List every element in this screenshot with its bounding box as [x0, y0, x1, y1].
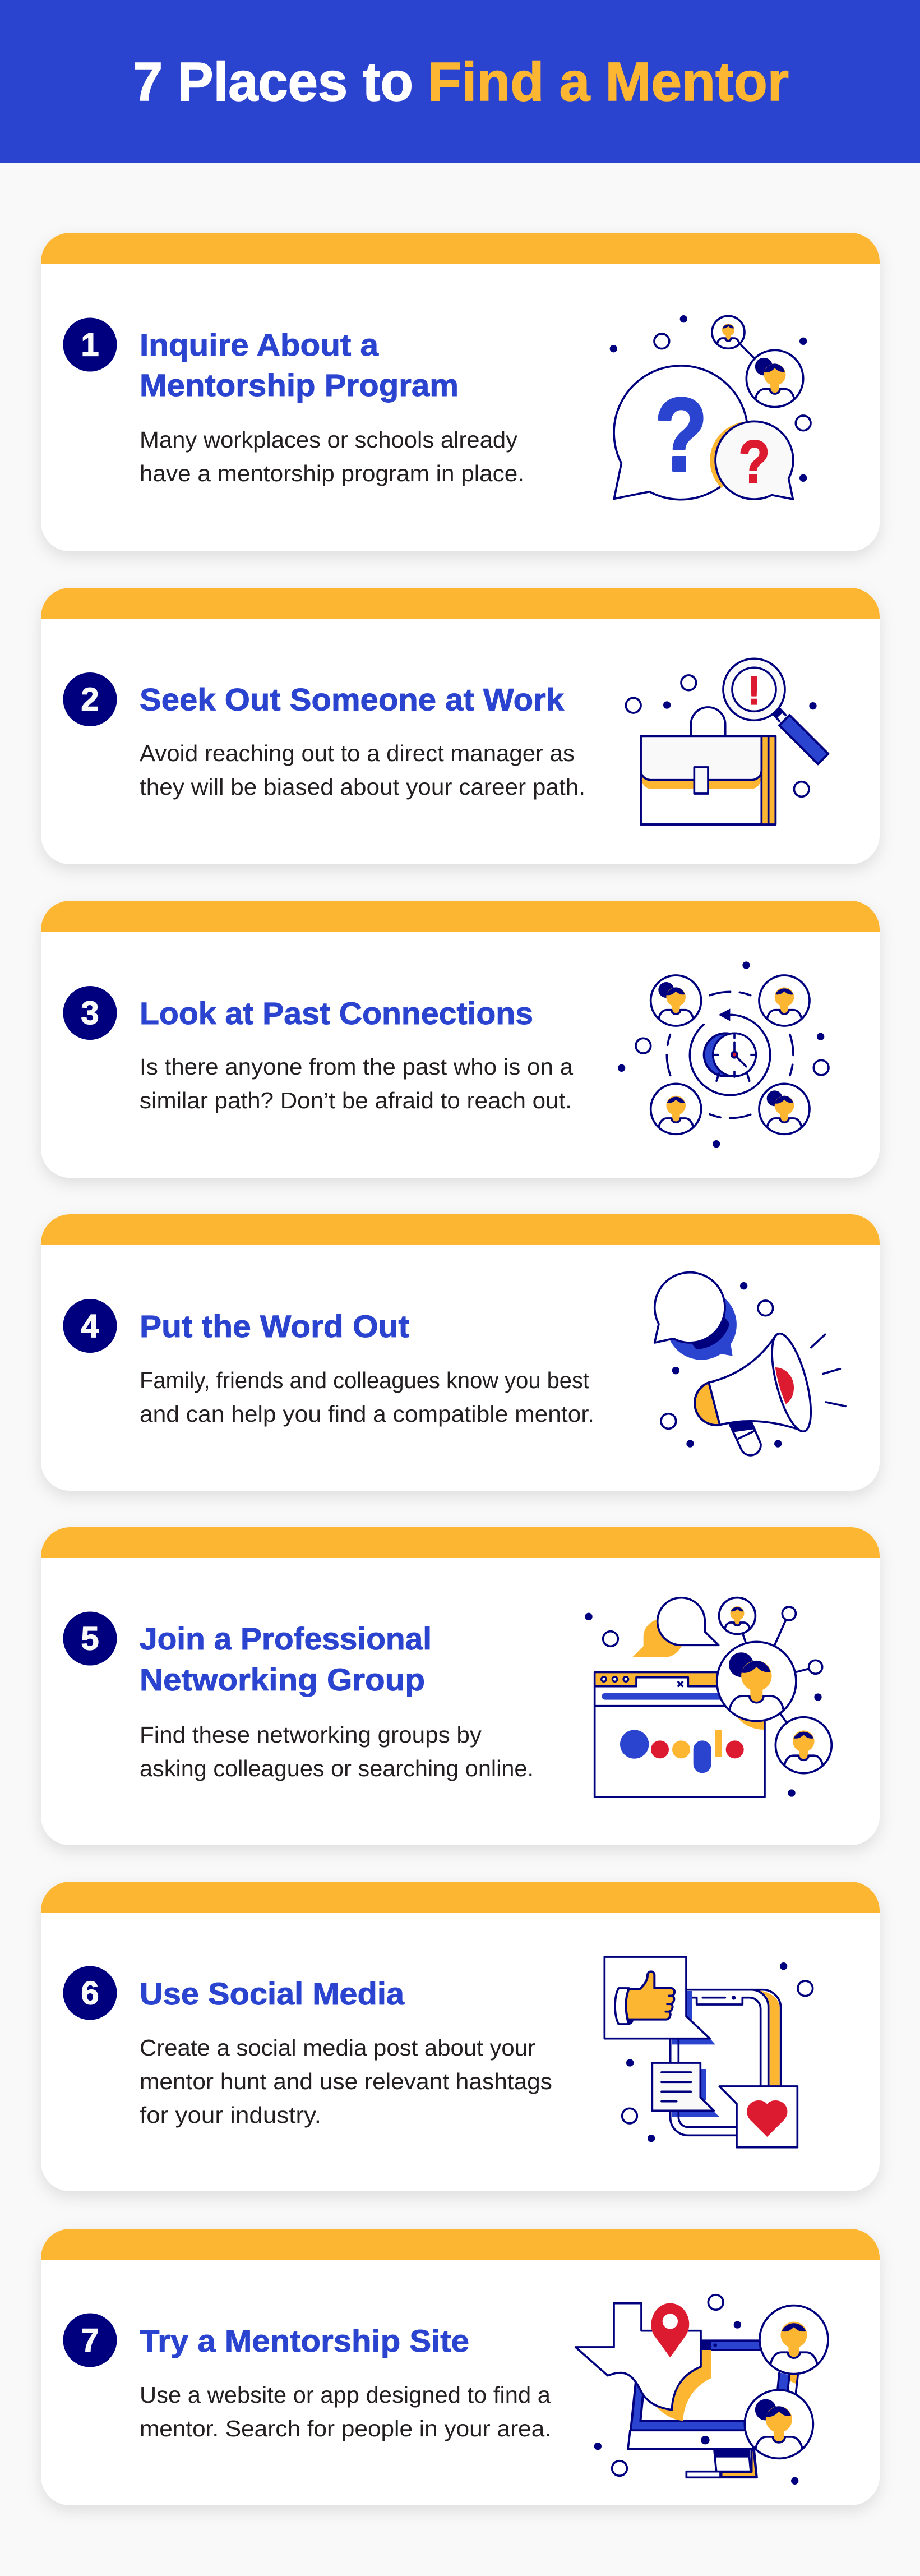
number badge 2: 2 [81, 681, 99, 718]
body text: and can help you find a compatible mentor. [140, 1401, 594, 1427]
panel: step 7 [41, 2229, 880, 2505]
heading: Put the Word Out [140, 1308, 409, 1344]
icon: phone with social media posts [604, 1957, 813, 2148]
heading: Join a Professional [140, 1621, 432, 1656]
body text: similar path? Don’t be afraid to reach out. [140, 1087, 572, 1113]
header banner [0, 0, 920, 163]
card top band [41, 2229, 880, 2260]
number badge 4 [63, 1299, 117, 1353]
icon: question speech bubbles: ? [738, 428, 770, 496]
heading: Use Social Media [140, 1976, 405, 2011]
body text [140, 740, 585, 800]
icon: question speech bubbles [610, 315, 811, 500]
icon: briefcase and magnifying glass: ! [747, 668, 761, 713]
title [133, 51, 789, 112]
body text: Family, friends and colleagues know you best [140, 1367, 590, 1393]
number badge 3 [63, 986, 117, 1040]
number badge 6: 6 [81, 1975, 99, 2011]
number badge 4: 4 [81, 1308, 99, 1344]
panel: step 1 [41, 233, 880, 551]
body text [140, 1367, 594, 1427]
number badge 3: 3 [81, 995, 99, 1031]
body text [140, 2382, 551, 2441]
body text: have a mentorship program in place. [140, 460, 524, 486]
card top band [41, 1882, 880, 1913]
body text: Use a website or app designed to find a [140, 2382, 551, 2408]
body text: Find these networking groups by [140, 1722, 482, 1748]
heading [140, 327, 459, 403]
body text: Is there anyone from the past who is on a [140, 1054, 573, 1080]
card body [41, 2229, 880, 2505]
icon: browser search and network [585, 1598, 831, 1797]
body text [140, 2035, 552, 2128]
panel: step 6 [41, 1882, 880, 2191]
heading: Inquire About a [140, 327, 379, 362]
title: 7 Places to [133, 51, 413, 112]
body text: mentor hunt and use relevant hashtags [140, 2068, 552, 2094]
body text: Avoid reaching out to a direct manager as [140, 740, 575, 766]
panel: step 3 [41, 901, 880, 1178]
card body [41, 901, 880, 1178]
heading: Networking Group [140, 1662, 425, 1697]
icon: monitor, map pin and people [576, 2295, 828, 2485]
heading: Mentorship Program [140, 367, 459, 403]
card body [41, 233, 880, 551]
card body [41, 1527, 880, 1845]
icon: megaphone and speech bubble [655, 1273, 845, 1455]
body text: for your industry. [140, 2102, 321, 2128]
body text: asking colleagues or searching online. [140, 1755, 534, 1781]
number badge 7: 7 [81, 2322, 99, 2359]
panel: step 5 [41, 1527, 880, 1845]
number badge 6 [63, 1966, 117, 2020]
card top band [41, 588, 880, 619]
title: Find a Mentor [428, 51, 789, 112]
body text: they will be biased about your career path. [140, 774, 585, 800]
icon: question speech bubbles: ? [654, 376, 708, 493]
heading [140, 1621, 432, 1697]
number badge 2 [63, 672, 117, 726]
panel: step 4 [41, 1214, 880, 1491]
body text [140, 1722, 534, 1781]
number badge 5 [63, 1612, 117, 1666]
card top band [41, 1527, 880, 1558]
card top band [41, 901, 880, 932]
icon: briefcase and magnifying glass [626, 658, 828, 824]
heading: Look at Past Connections [140, 996, 533, 1031]
body text: mentor. Search for people in your area. [140, 2416, 551, 2441]
panel: step 2 [41, 588, 880, 864]
heading: Seek Out Someone at Work [140, 682, 565, 717]
number badge 1 [63, 317, 117, 371]
number badge 1: 1 [81, 326, 99, 363]
body text [140, 427, 524, 486]
card top band [41, 1214, 880, 1245]
body text: Create a social media post about your [140, 2035, 535, 2061]
card top band [41, 233, 880, 264]
body text [140, 1054, 573, 1113]
number badge 7 [63, 2313, 117, 2367]
icon: clock and past connections [618, 961, 829, 1148]
card body [41, 1214, 880, 1491]
number badge 5: 5 [81, 1621, 99, 1657]
body text: Many workplaces or schools already [140, 427, 517, 453]
card body [41, 1882, 880, 2191]
heading: Try a Mentorship Site [140, 2323, 469, 2358]
card body [41, 588, 880, 864]
